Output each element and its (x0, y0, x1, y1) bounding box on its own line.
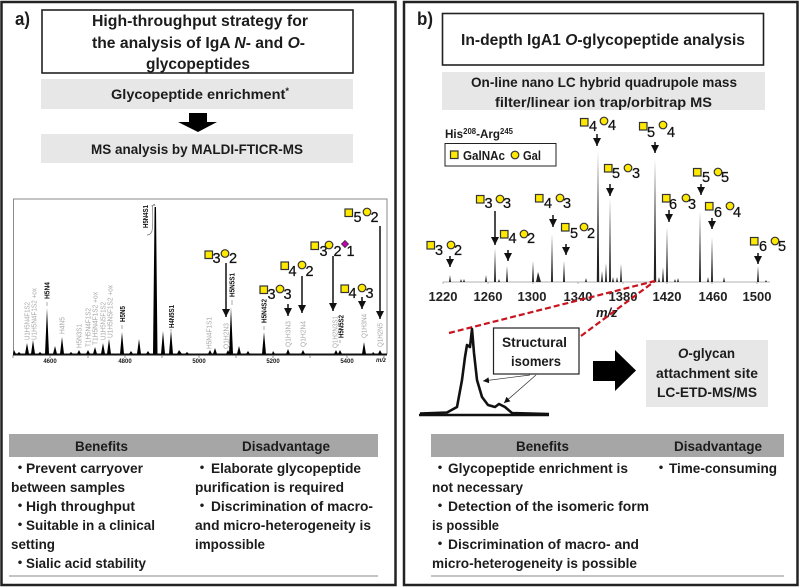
glycan: 6 5: 6 (759, 239, 767, 255)
glycan: 5 5: 5 (721, 170, 729, 186)
panel label a: a) (15, 9, 30, 29)
axis tick labels: 1260 (474, 289, 502, 304)
peak labels: Q1H3N3 (286, 321, 292, 347)
list: benefits: micro-heterogeneity is possible (432, 555, 637, 571)
glycan: 6 4 (706, 202, 741, 229)
peak labels: H5N4 (44, 282, 52, 299)
peak labels: U1H5N4F1S2 +ox (32, 288, 38, 340)
peak labels: Q1H3N4 (362, 314, 368, 338)
table header: Disadvantage (674, 438, 762, 454)
table header: Benefits (75, 438, 128, 454)
glycan: 3 GalNAc 2 Gal (205, 250, 237, 317)
glycan: 5 5 (694, 168, 729, 195)
axis tick labels: 1300 (518, 289, 546, 304)
axis labels: 5400 (340, 359, 354, 365)
peak labels: H5N5S2 (338, 315, 346, 338)
panel: b) in-depth IgA1 analysis (404, 2, 798, 585)
table header (431, 434, 784, 457)
glycan: 3 3: 3 (484, 196, 493, 212)
glycan: 3 3: 3 (503, 196, 511, 212)
axis tick labels: 1340 (564, 289, 592, 304)
glycan: 6 3: 6 (669, 197, 677, 213)
glycan: 3 2: 3 (435, 243, 443, 259)
list: benefits: Detection of the isomeric form (448, 498, 649, 514)
glycan: 5 GalNAc 2 Gal: 5 (354, 210, 362, 226)
peak labels: Q1H2N3 (224, 323, 230, 349)
glycan: 4 GalNAc 2 Gal: 2 (306, 264, 314, 280)
table header: Benefits (516, 438, 569, 454)
list: benefits (432, 460, 649, 571)
glycan: 4 4: 4 (608, 118, 616, 134)
list: benefits: setting (11, 536, 55, 552)
glycan: 6 5 (750, 237, 786, 264)
step: glycopeptide enrichment (41, 79, 353, 109)
box: O-glycan attachment site (646, 340, 768, 407)
peak labels (24, 204, 384, 349)
glycan: 3 3 (476, 195, 511, 245)
axis labels (43, 358, 386, 365)
glycan: 4 GalNAc 3 Gal: 3 (366, 286, 374, 302)
list: benefits: Glycopeptide enrichment is (448, 460, 628, 476)
table: panel a benefits and disadvantage (9, 434, 378, 576)
list: disadvantage: and micro-heterogeneity is (195, 517, 371, 533)
axis tick labels: 1380 (609, 289, 637, 304)
list: benefits: ・ (433, 498, 447, 514)
list: benefits: not necessary (432, 479, 523, 495)
glycan: 4 GalNAc 3 Gal: 4 (348, 286, 357, 302)
title: panel a: High-throughput strategy for (92, 13, 308, 30)
glycan: 5 4 (640, 121, 675, 153)
list: benefits: Suitable in a clinical (26, 517, 155, 533)
step: MS analysis (41, 134, 353, 163)
axis tick labels (429, 289, 771, 304)
peak labels: U1H5N5F1S2 +ox (108, 285, 114, 338)
peak labels: Q1H2N4 (300, 321, 308, 347)
glycan: 4 2: 4 (508, 231, 517, 247)
step: glycopeptide enrichment: Glycopeptide enrichment (111, 86, 279, 102)
panel: a) high-throughput strategy (2, 2, 396, 585)
glycan: 4 3: 3 (563, 196, 571, 212)
axis tick labels: 1420 (653, 289, 681, 304)
axis title: m/z (596, 305, 618, 320)
glycan: 5 3: 5 (612, 166, 620, 182)
panel label b: b) (417, 9, 433, 29)
peak labels: H5N4S1 (143, 205, 150, 228)
glycan: 3 GalNAc 3 Gal: 3 (268, 287, 276, 303)
glycan: 5 5: 5 (702, 170, 710, 186)
glycan: 4 GalNAc 2 Gal: 4 (288, 264, 297, 280)
glycan: 3 GalNAc 2 Gal 1 sialic acid: 3 (320, 244, 328, 260)
axis labels: m/z (376, 358, 386, 364)
glycan: 5 3 (604, 164, 640, 196)
arrow: to attachment site analysis (593, 350, 636, 391)
peak labels: H4N5S1 (169, 305, 176, 328)
list: disadvantage: ・ (654, 460, 668, 476)
step: MS analysis: MS analysis by MALDI-FTICR-MS (91, 141, 303, 157)
peak labels: H5N5 (120, 306, 127, 322)
legend: glycan symbols (445, 144, 556, 166)
axis labels: 5000 (192, 359, 206, 365)
glycan: 5 2: 2 (587, 226, 595, 242)
list: disadvantage: ・ (195, 498, 209, 514)
glycan: 5 2 (562, 223, 595, 255)
list: benefits: ・ (433, 536, 447, 552)
chart: extracted ion chromatogram (419, 329, 549, 415)
box: O-glycan attachment site: O-glycan (678, 345, 735, 361)
list: benefits: ・ (13, 555, 27, 571)
glycan: 5 3: 3 (632, 166, 640, 182)
peak labels: U1H5N4F1S2 (24, 302, 32, 340)
step: on-line LC MS: filter/linear ion trap/orbitrap MS (495, 94, 712, 110)
glycan: 6 4: 6 (714, 205, 722, 221)
glycan: 3 GalNAc 3 Gal (260, 285, 292, 316)
list: benefits: between samples (11, 479, 125, 495)
peak labels: H5N4S2 (262, 299, 268, 323)
glycan: 5 GalNAc 2 Gal (345, 208, 380, 319)
list: benefits: Sialic acid stability (26, 555, 146, 571)
callout: structural isomers: isomers (511, 353, 561, 369)
title: panel b (442, 14, 764, 65)
list: benefits: is possible (432, 517, 499, 533)
list: benefits: ・ (13, 517, 27, 533)
list: disadvantage: Time-consuming (669, 460, 777, 476)
box: O-glycan attachment site: attachment site (656, 365, 758, 381)
glycan: 3 GalNAc 3 Gal: 3 (284, 287, 292, 303)
glycan: 3 2 (427, 241, 462, 267)
step: on-line LC MS: On-line nano LC hybrid quadrupole mass (471, 74, 737, 90)
glycan: 3 GalNAc 2 Gal 1 sialic acid (311, 240, 355, 311)
title: panel b: In-depth IgA1 O-glycopeptide analysis (461, 32, 745, 49)
list: disadvantage: purification is required (195, 479, 344, 495)
glycan: 5 2: 5 (570, 226, 578, 242)
legend: glycan symbols: Gal (523, 148, 541, 163)
arrow: enrichment to MS (178, 113, 217, 132)
list: disadvantage: Discrimination of macro- (211, 498, 373, 514)
glycan: 4 GalNAc 2 Gal (281, 261, 314, 313)
peak labels: H4N5 (60, 317, 66, 334)
glycan: 5 4: 5 (647, 125, 655, 141)
glycan: 6 3 (662, 194, 696, 222)
glycan: 5 GalNAc 2 Gal: 2 (370, 210, 379, 226)
glycan: 4 3: 4 (544, 196, 552, 212)
box: O-glycan attachment site: LC-ETD-MS/MS (657, 384, 757, 400)
peak labels: T1H5N4F1S2 (86, 308, 92, 347)
peak labels: H5N3S1 (76, 324, 84, 348)
axis tick labels: 1500 (743, 289, 771, 304)
peak labels: T1H5N4F1S2 +ox (92, 292, 100, 345)
glycan annotations with arrows: panel b (427, 117, 786, 267)
glycan: 3 GalNAc 2 Gal: 2 (229, 251, 237, 267)
glycan: 6 3: 3 (688, 197, 696, 213)
list: benefits: High throughput (26, 498, 135, 514)
list: disadvantage: ・ (195, 460, 209, 476)
glycan: 4 GalNAc 3 Gal (341, 284, 374, 309)
glycan: 4 3 (536, 194, 571, 227)
axis labels: 4600 (43, 359, 57, 365)
peak labels: H5N4F1S1 (206, 317, 214, 349)
glycan: 5 4: 4 (667, 125, 675, 141)
axis tick labels: 1460 (699, 289, 727, 304)
peptide label: -Arg (476, 127, 500, 141)
glycan: 3 2: 2 (454, 243, 462, 259)
title: panel a: glycopeptides (146, 56, 250, 73)
list: disadvantage: impossible (195, 536, 265, 552)
table: panel b benefits and disadvantage (431, 434, 784, 576)
glycan: 3 GalNAc 2 Gal 1 sialic acid: 1 (346, 244, 355, 260)
table header: Disadvantage (242, 438, 330, 454)
glycan: 3 GalNAc 2 Gal 1 sialic acid: 2 (334, 244, 342, 260)
peak labels: Q1H2N3S1 (332, 316, 340, 348)
list: benefits: Discrimination of macro- and (448, 536, 639, 552)
glycan: 6 5: 5 (778, 239, 786, 255)
callout: structural isomers: Structural (502, 334, 567, 350)
list: benefits: ・ (13, 460, 27, 476)
peptide label: His (445, 127, 464, 141)
list: benefits: ・ (433, 460, 447, 476)
title: panel a: the analysis of IgA N- and O- (92, 35, 305, 52)
glycan: 4 2 (500, 230, 535, 261)
list: benefits: Prevent carryover (26, 460, 144, 476)
peak labels: H5N5S1 (230, 273, 236, 297)
chart: MALDI-FTICR mass spectrum (13, 199, 387, 365)
callout: structural isomers (494, 328, 579, 374)
peptide label: 208 (463, 127, 477, 136)
glycan: 3 GalNAc 2 Gal: 3 (212, 251, 221, 267)
list: benefits: ・ (13, 498, 27, 514)
glycan: 6 4: 4 (733, 205, 741, 221)
zoom guide: red dashed lines (449, 281, 655, 336)
peak labels: Q1H2N5 (378, 323, 384, 347)
glycan annotations with arrows: panel a (205, 208, 380, 319)
list: benefits (11, 460, 155, 571)
peak labels: U1H5N5F1S2 (100, 302, 108, 340)
title: panel a (42, 10, 353, 73)
step: glycopeptide enrichment: * (285, 86, 290, 96)
axis tick labels: 1220 (429, 289, 457, 304)
axis labels: 4800 (118, 359, 132, 365)
axis labels: 5200 (266, 359, 280, 365)
step: on-line LC MS (442, 72, 765, 110)
table header (9, 434, 378, 457)
legend: glycan symbols: GalNAc (463, 148, 505, 163)
glycan: 4 2: 2 (527, 231, 535, 247)
list: disadvantage (195, 460, 373, 552)
list: disadvantage: Elaborate glycopeptide (211, 460, 361, 476)
chart: LC-MS spectrum (429, 151, 771, 320)
peptide label: 245 (500, 127, 514, 136)
glycan: 4 4: 4 (589, 119, 597, 135)
glycan: 4 4 (580, 117, 616, 146)
